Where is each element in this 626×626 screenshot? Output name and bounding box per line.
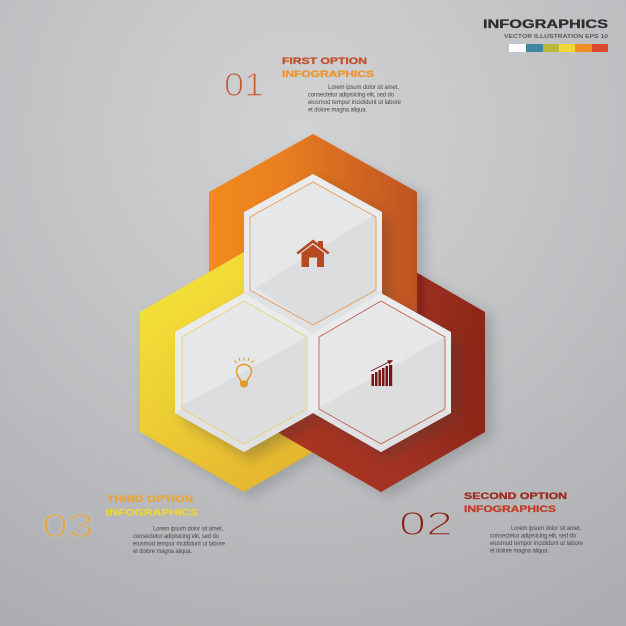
heading: third option: THIRD OPTION [107,494,193,504]
colour bar [509,44,608,52]
header: infographics branding [483,19,608,52]
brand subtitle: VECTOR ILLUSTRATION EPS 10 [504,34,608,40]
diagram: three overlapping hexagons [140,134,493,498]
body text: eiusmod tempor incididunt ut labore [490,541,584,547]
number 03: 03 [42,507,94,544]
body text: consectetur adipisicing elit, sed do [490,534,577,540]
panel: second option hexagon [313,293,451,452]
body text: consectetur adipisicing elit, sed do [308,92,395,98]
body text: Lorem ipsum dolor sit amet, [328,85,399,91]
number 01: 01 [224,66,264,103]
icon: house [296,240,330,267]
number 02: 02 [399,505,453,542]
body text: Lorem ipsum dolor sit amet, [153,526,223,532]
body text: et dolore magna aliqua. [490,548,549,554]
heading: first option: FIRST OPTION [282,56,367,66]
hexagon: dark red [277,252,485,492]
body text: eiusmod tempor incididunt ut labore [308,100,402,106]
panel: third option hexagon [175,293,313,452]
shadow of orange on red [417,260,423,318]
hexagon: orange [209,134,417,372]
body text [133,526,226,555]
icon: growth chart [371,360,393,386]
brand title: INFOGRAPHICS [483,19,608,31]
hexagon: yellow [140,252,348,492]
panel: first option hexagon [244,174,382,333]
body text: et dolore magna aliqua. [308,108,367,114]
orange overlap on red [313,134,417,372]
body text [490,526,584,554]
callout: third option [42,494,226,555]
callout: first option [224,56,402,114]
shadow beneath coloured hexagons [146,142,493,498]
icon: light bulb [234,358,254,388]
heading: second option: SECOND OPTION [464,491,567,501]
shadows under light hexagons [183,180,459,460]
subheading: INFOGRAPHICS [106,508,198,518]
callout: second option [399,491,584,554]
body text [308,85,402,114]
body text: eiusmod tempor incididunt ut labore [133,542,226,548]
body text: consectetur adipisicing elit, sed do [133,534,220,540]
body text: Lorem ipsum dolor sit amet, [511,526,581,532]
subheading: INFOGRAPHICS [464,504,556,514]
subheading: INFOGRAPHICS [282,69,374,79]
body text: et dolore magna aliqua. [133,549,192,555]
